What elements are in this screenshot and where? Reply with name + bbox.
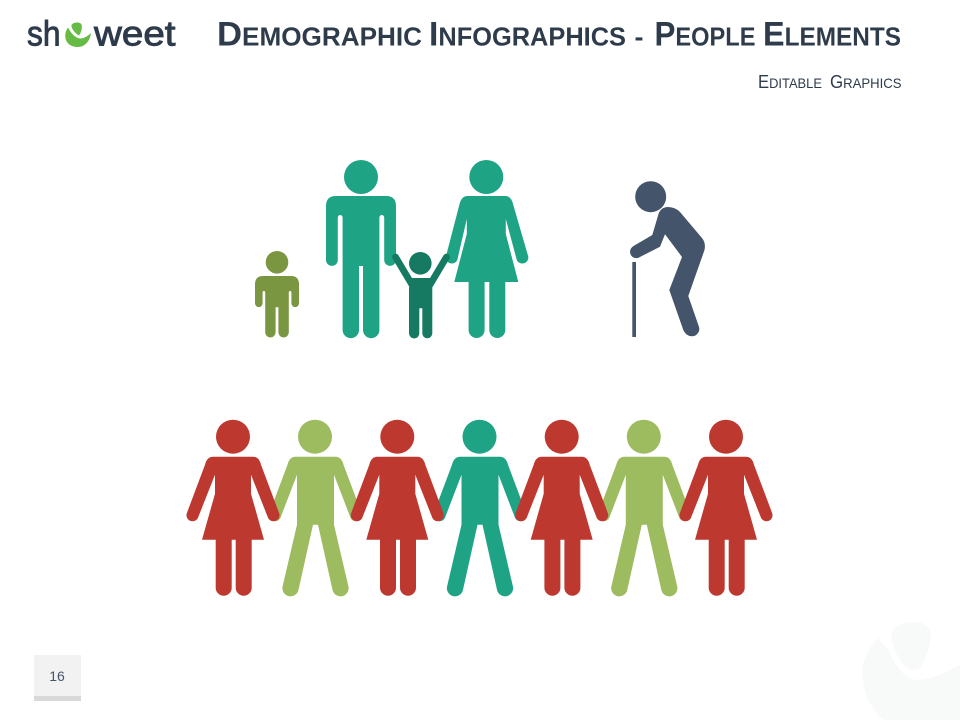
page number: 16 [49, 668, 65, 684]
title: - [634, 22, 644, 52]
watermark logo [863, 622, 960, 720]
person: red woman 4 [679, 420, 773, 596]
icon: elderly person with cane [630, 181, 705, 337]
icon: adult woman [446, 160, 528, 338]
title: INFOGRAPHICS [429, 16, 626, 54]
person: green man 1 [269, 420, 362, 596]
title: DEMOGRAPHIC [217, 16, 422, 54]
title [217, 16, 901, 54]
logo: showeet: weet [93, 14, 176, 54]
person: red woman 3 [515, 420, 608, 596]
subtitle: GRAPHICS [830, 72, 902, 92]
subtitle [758, 72, 902, 92]
person: red woman 1 [186, 420, 280, 596]
icon: child holding hands [396, 252, 446, 338]
page number [34, 655, 81, 701]
logo: showeet [27, 14, 176, 54]
logo: showeet: sh [27, 14, 60, 54]
subtitle: EDITABLE [758, 72, 822, 92]
title: PEOPLE [654, 16, 756, 54]
person: red woman 2 [351, 420, 444, 596]
icon: adult man [326, 160, 396, 338]
person: green man 2 [598, 420, 691, 596]
row of people holding hands [186, 420, 773, 596]
person: teal man [433, 420, 527, 596]
title: ELEMENTS [763, 16, 901, 54]
icon: small olive child [255, 251, 299, 337]
